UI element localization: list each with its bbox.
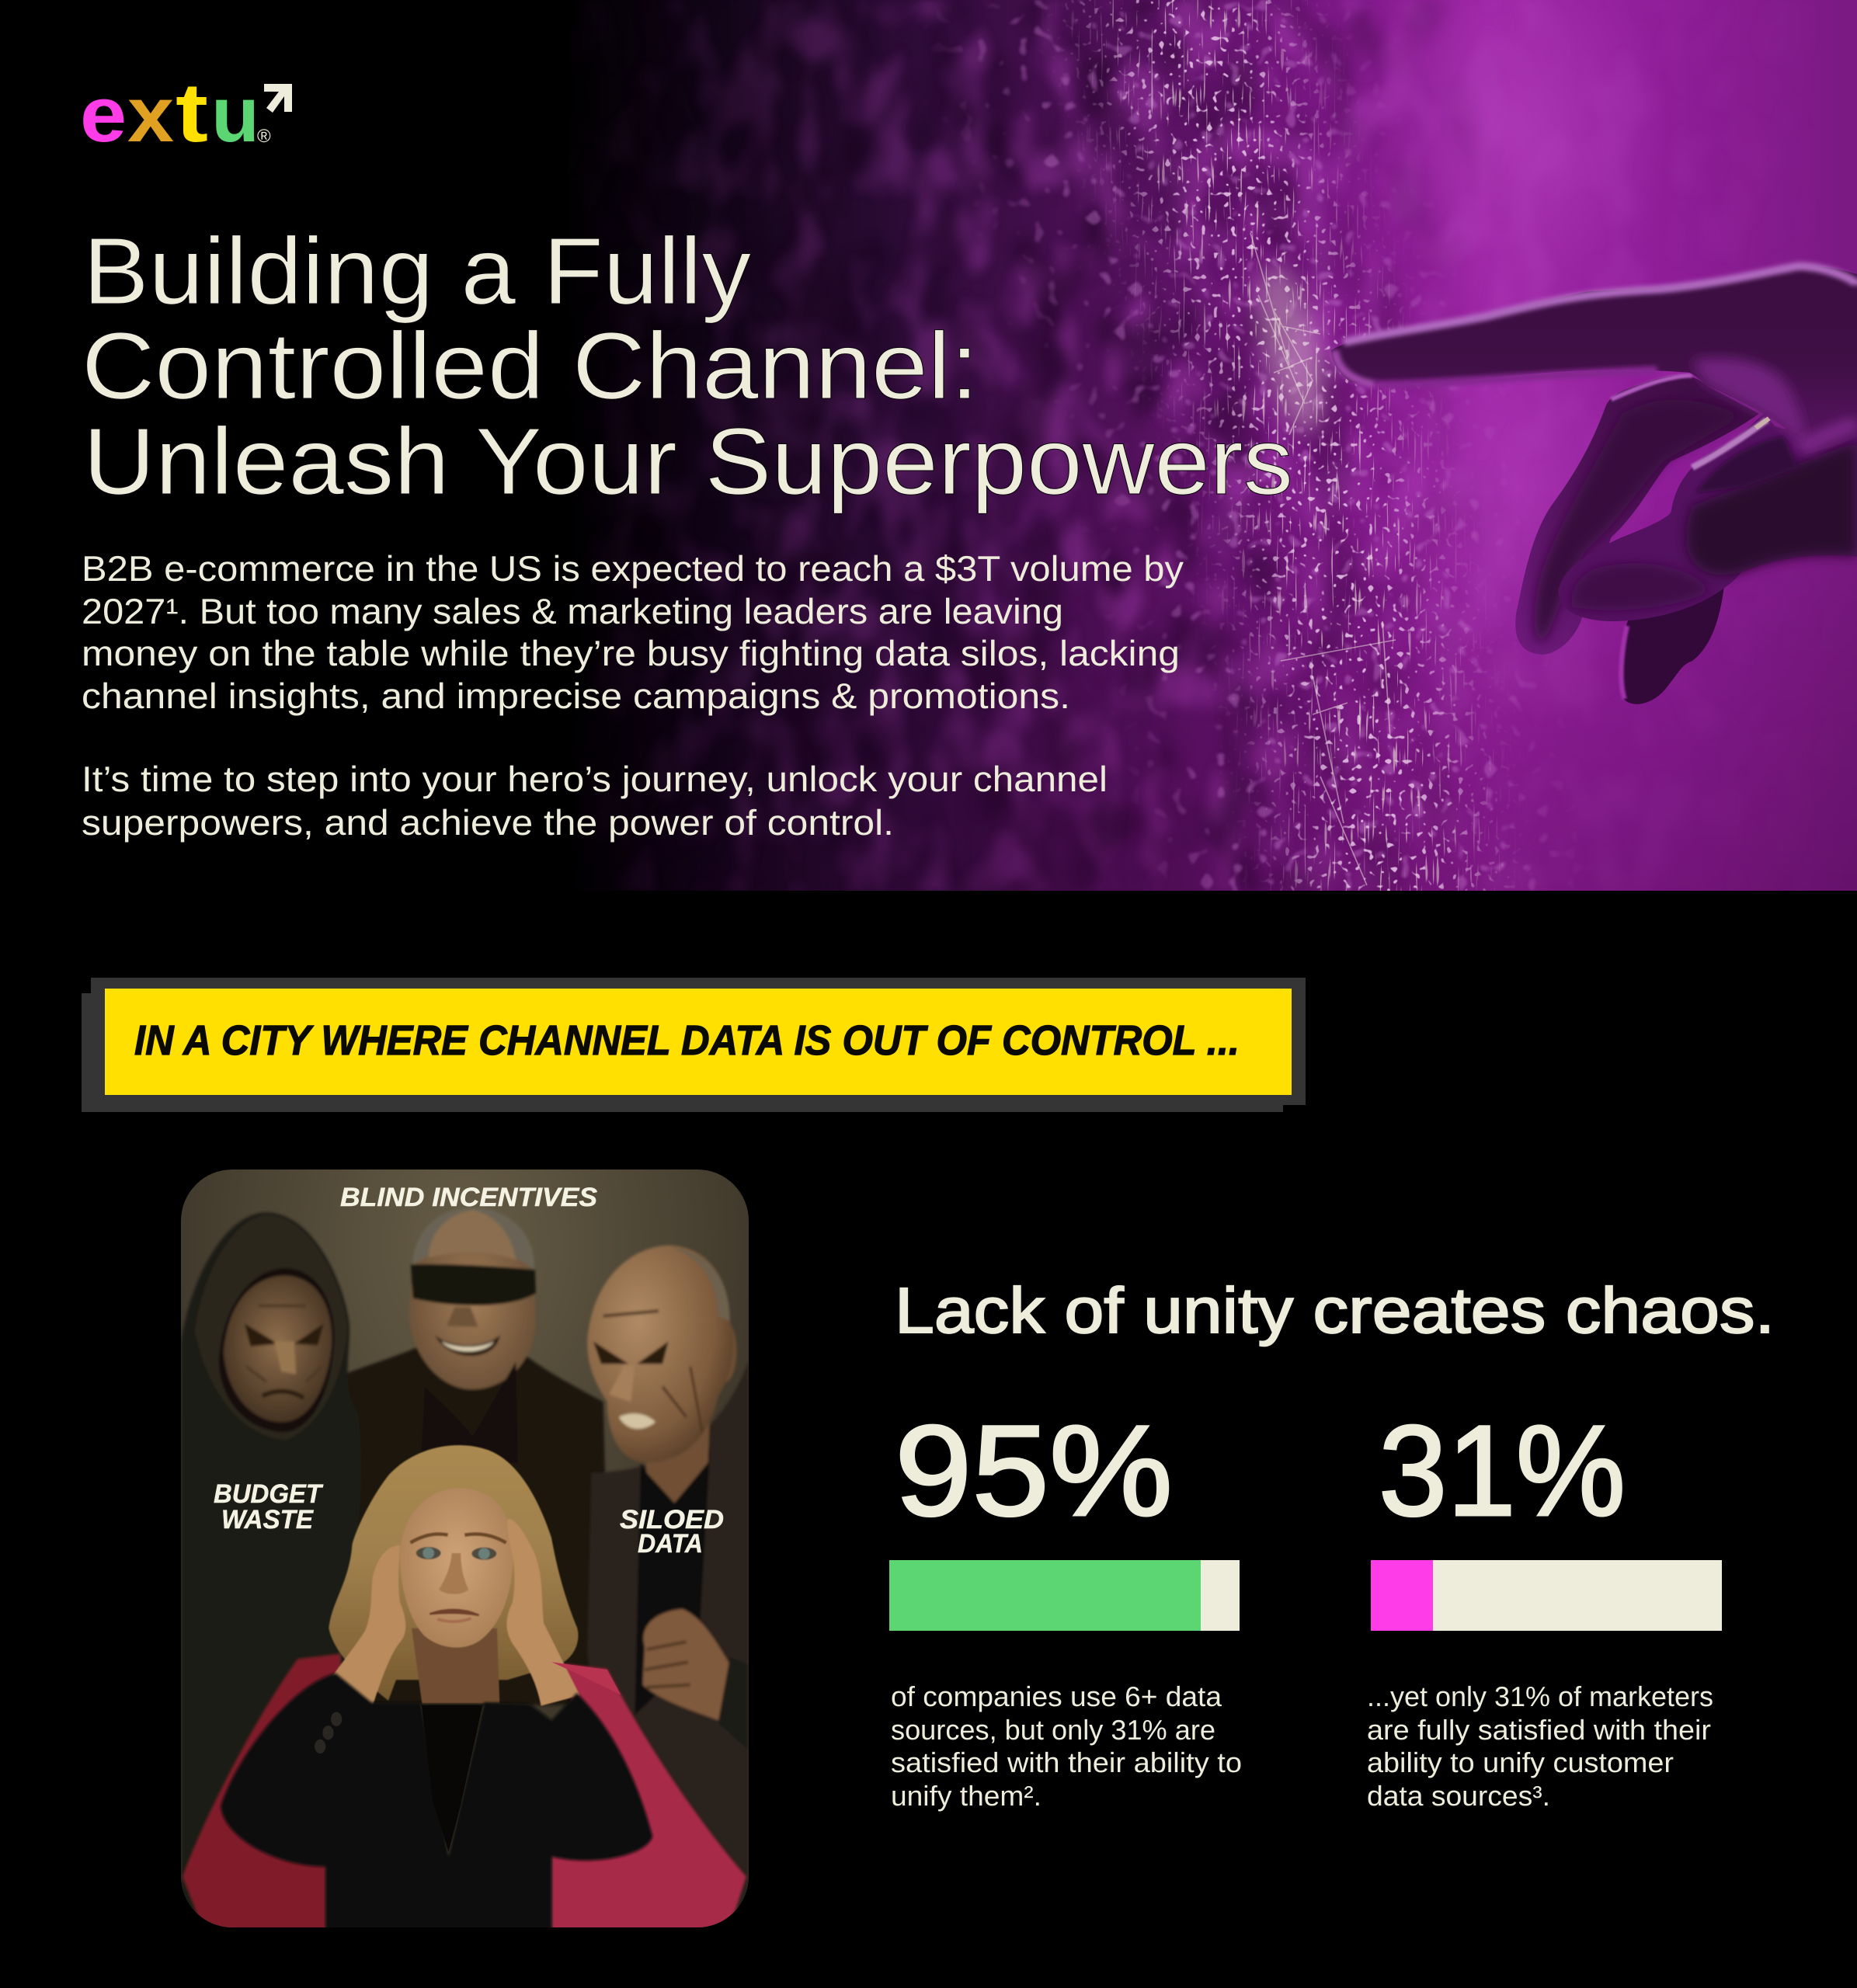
- logo: extu: ®: [257, 126, 271, 147]
- heading: lack of unity: Lack of unity creates chaos.: [895, 1274, 1775, 1347]
- text block: call to action paragraph: superpowers, and achieve the power of control.: [82, 802, 894, 843]
- text block: 95 percent description: satisfied with their ability to: [891, 1746, 1242, 1778]
- text block: intro paragraph: money on the table while they’re busy fighting data silos, lacking: [82, 633, 1180, 673]
- logo: extu: [80, 65, 292, 159]
- illustration: three villains and cape: [181, 1208, 749, 1938]
- logo: extu: e: [80, 71, 127, 158]
- text block: 95 percent description: [891, 1680, 1242, 1812]
- label: blind incentives: BLIND INCENTIVES: [340, 1183, 597, 1212]
- text block: intro paragraph: B2B e-commerce in the US is expected to reach a $3T volume by: [82, 548, 1184, 589]
- bar chart: 31 percent: [1371, 1560, 1722, 1631]
- stat: 31 percent: 31%: [1379, 1399, 1626, 1543]
- label: siloed data: SILOED: [620, 1505, 724, 1534]
- bar chart: 95 percent: [889, 1560, 1240, 1631]
- panel: hero background image: [586, 0, 1857, 891]
- text block: 31 percent description: [1367, 1680, 1713, 1812]
- label: budget waste: [214, 1479, 324, 1534]
- text block: 95 percent description: unify them².: [891, 1780, 1042, 1812]
- text block: 95 percent description: of companies use 6+ data: [891, 1680, 1222, 1712]
- text block: 95 percent description: sources, but only 31% are: [891, 1714, 1215, 1746]
- text block: 31 percent description: ...yet only 31% of marketers: [1367, 1680, 1713, 1712]
- label: siloed data: [620, 1505, 724, 1559]
- illustration: pointing hand: [1331, 266, 1857, 704]
- panel: photo of hero and three villains: [181, 1170, 749, 1938]
- text block: call to action paragraph: [82, 759, 1108, 843]
- text block: 31 percent description: ability to unify customer: [1367, 1746, 1674, 1778]
- text block: intro paragraph: 2027¹. But too many sales & marketing leaders are leaving: [82, 591, 1063, 631]
- logo: extu: t: [176, 65, 208, 159]
- text block: 31 percent description: are fully satisfied with their: [1367, 1714, 1711, 1746]
- text block: call to action paragraph: It’s time to step into your hero’s journey, unlock your channel: [82, 759, 1108, 799]
- banner: city out of control: [82, 978, 1306, 1112]
- logo: extu: x: [127, 71, 174, 158]
- title: Controlled Channel:: [82, 313, 979, 419]
- banner: city out of control: IN A CITY WHERE CHANNEL DATA IS OUT OF CONTROL ...: [134, 1017, 1240, 1064]
- label: budget waste: BUDGET: [214, 1479, 324, 1509]
- illustration: woman's jacket: [221, 1662, 652, 1938]
- stat: 95 percent: 95%: [895, 1399, 1173, 1543]
- illustration: distressed woman head and hands: [329, 1445, 580, 1706]
- label: budget waste: WASTE: [221, 1505, 314, 1534]
- title: Unleash Your Superpowers: [83, 408, 1293, 514]
- label: siloed data: DATA: [638, 1529, 703, 1559]
- text block: intro paragraph: [82, 548, 1184, 716]
- text block: 31 percent description: data sources³.: [1367, 1780, 1550, 1812]
- logo: extu: u: [211, 71, 259, 158]
- title: Building a Fully: [83, 218, 751, 324]
- text block: intro paragraph: channel insights, and imprecise campaigns & promotions.: [82, 676, 1070, 716]
- title: [82, 218, 1293, 514]
